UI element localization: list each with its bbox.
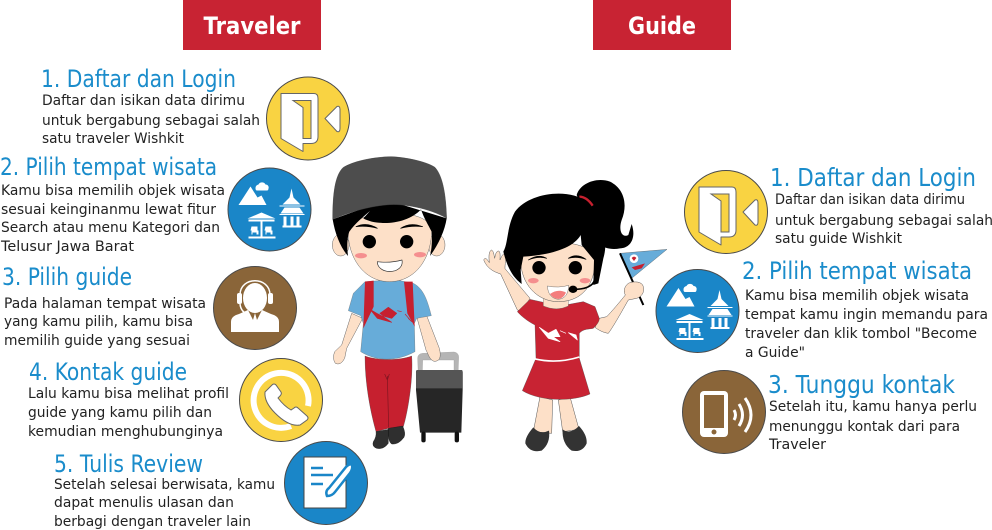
character: guide girl: [484, 180, 667, 451]
guide step 3 text: [768, 370, 977, 453]
icon: traveler login: [266, 77, 350, 160]
boy smile: [377, 260, 402, 271]
girl right arm and hand: [595, 282, 644, 333]
traveler step 5 text: Setelah selesai berwisata, kamu: [54, 477, 275, 493]
boy cheeks: [355, 252, 426, 258]
traveler step 1 text: untuk bergabung sebagai salah: [42, 113, 260, 129]
traveler step 4 text: guide yang kamu pilih dan: [28, 405, 212, 421]
icon: guide login: [684, 170, 768, 254]
traveler step 2 text: [0, 153, 225, 255]
boy face: [348, 213, 432, 282]
girl cheeks: [528, 278, 590, 283]
traveler step 2 text: Kamu bisa memilih objek wisata: [1, 183, 225, 199]
heading: Traveler: Traveler: [204, 12, 301, 40]
icon: traveler destinations: [228, 168, 311, 251]
boy pants crease: [385, 374, 389, 427]
boy ears: [332, 234, 445, 256]
guide step 2 text: [742, 257, 988, 361]
icon: guide destinations: [656, 270, 739, 352]
guide step 3 text: menunggu kontak dari para: [769, 419, 960, 435]
traveler step 5 text: [54, 450, 275, 530]
guide step 2 text: Kamu bisa memilih objek wisata: [745, 288, 969, 304]
girl eyes: [528, 256, 586, 274]
girl dress: [517, 299, 599, 399]
traveler step 3 text: yang kamu pilih, kamu bisa: [4, 314, 193, 330]
traveler step 4 text: 4. Kontak guide: [29, 358, 187, 386]
guide step 2 text: traveler dan klik tombol "Become: [745, 326, 977, 342]
girl face: [521, 242, 595, 302]
guide step 3 text: Setelah itu, kamu hanya perlu: [769, 399, 977, 415]
boy neck and shirt: [348, 281, 431, 359]
girl hair tie: [579, 197, 593, 206]
guide step 1 text: [770, 163, 992, 247]
guide step 1 text: satu guide Wishkit: [775, 231, 902, 247]
girl mouth: [547, 285, 569, 299]
traveler step 5 text: 5. Tulis Review: [54, 450, 203, 478]
traveler step 1 text: 1. Daftar dan Login: [41, 65, 236, 93]
guide step 1 text: Daftar dan isikan data dirimu: [775, 192, 965, 208]
boy arms: [333, 313, 440, 364]
girl ponytail: [577, 180, 633, 249]
traveler step 5 text: berbagi dengan traveler lain: [54, 514, 251, 530]
girl belt: [535, 357, 579, 361]
traveler step 3 text: 3. Pilih guide: [2, 263, 132, 291]
heading: Guide: Guide: [628, 12, 696, 40]
traveler step 4 text: kemudian menghubunginya: [28, 424, 223, 440]
heading: Traveler: [183, 0, 321, 50]
traveler step 3 text: Pada halaman tempat wisata: [4, 296, 206, 312]
traveler step 3 text: memilih guide yang sesuai: [4, 333, 190, 349]
icon: traveler guide headset: [214, 266, 296, 350]
girl dress map: [539, 327, 577, 342]
traveler step 2 text: Telusur Jawa Barat: [0, 239, 134, 255]
icon: traveler phone contact: [240, 358, 322, 442]
girl flag: [620, 249, 667, 305]
boy hair: [333, 200, 447, 256]
icon: traveler write review: [284, 442, 368, 524]
traveler step 1 text: Daftar dan isikan data dirimu: [42, 93, 245, 109]
character: traveler boy: [332, 157, 463, 449]
girl headset: [569, 277, 595, 293]
icon: guide phone signal: [682, 370, 766, 454]
suitcase: [416, 352, 463, 442]
traveler step 5 text: dapat menulis ulasan dan: [54, 495, 234, 511]
boy eyes: [356, 225, 423, 248]
traveler step 3 text: [2, 263, 206, 349]
heading: Guide: [593, 0, 731, 50]
boy pants: [365, 356, 412, 432]
girl hair: [503, 194, 605, 285]
guide step 2 text: tempat kamu ingin memandu para: [745, 307, 988, 323]
guide step 3 text: 3. Tunggu kontak: [768, 370, 955, 399]
boy shoes: [373, 426, 405, 449]
girl legs: [533, 397, 579, 433]
boy shirt map: [370, 307, 412, 322]
guide step 2 text: a Guide": [745, 345, 805, 361]
traveler step 2 text: sesuai keinginanmu lewat fitur: [1, 202, 216, 218]
traveler step 1 text: satu traveler Wishkit: [42, 131, 184, 147]
girl left arm and hand: [484, 250, 530, 312]
boy hat: [333, 157, 447, 219]
traveler step 1 text: [41, 65, 260, 147]
traveler step 4 text: Lalu kamu bisa melihat profil: [28, 386, 229, 402]
traveler step 2 text: Search atau menu Kategori dan: [1, 220, 220, 236]
boy backpack straps: [363, 281, 415, 328]
girl shoes: [525, 426, 587, 451]
traveler step 2 text: 2. Pilih tempat wisata: [0, 153, 217, 181]
guide step 3 text: Traveler: [768, 437, 826, 453]
traveler step 4 text: [28, 358, 229, 440]
girl neck: [543, 297, 568, 309]
